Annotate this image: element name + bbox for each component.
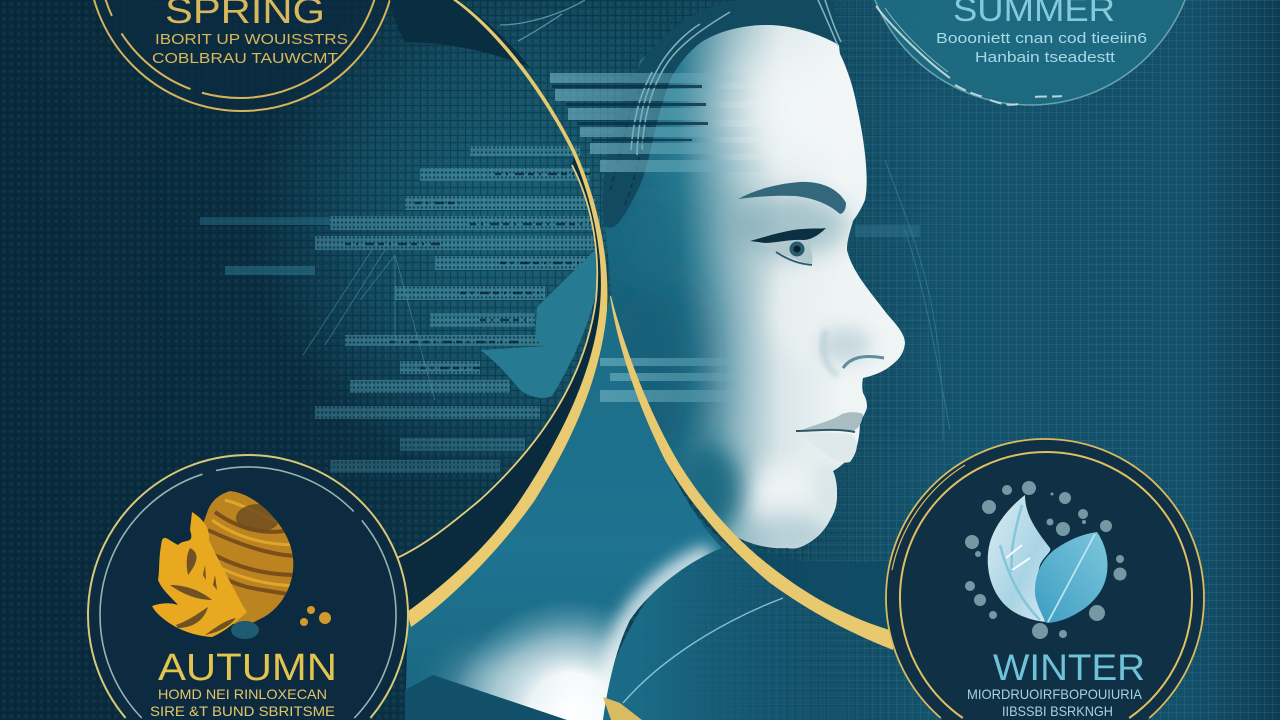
lips <box>796 412 863 463</box>
panel: summer <box>863 0 1197 105</box>
leaf dark cuts <box>170 548 236 635</box>
data stripes: left dissolving text rows <box>200 146 600 473</box>
curve: thin inner gold arc <box>397 165 597 558</box>
winter heading: WINTER <box>993 647 1145 688</box>
iris <box>790 242 804 256</box>
shoulder shadow <box>405 675 567 720</box>
spring text <box>152 31 348 67</box>
autumn heading: AUTUMN <box>158 647 337 689</box>
neck and shoulder <box>405 296 722 720</box>
blue leaf midrib <box>1048 534 1095 622</box>
autumn outer ring <box>88 455 408 718</box>
leaf seeds <box>300 606 331 626</box>
autumn text: HOMD NEI RINLOXECAN <box>158 686 327 702</box>
dark zone under chin <box>745 543 893 631</box>
spring text: IBORIT UP WOUISSTRS <box>155 31 348 48</box>
panel: autumn <box>88 455 408 720</box>
autumn inner ring <box>100 467 396 718</box>
eyebrow <box>738 182 846 214</box>
winter inner ring <box>900 452 1192 718</box>
nose silhouette on left side <box>480 250 597 398</box>
glitch stripes over face <box>550 73 920 402</box>
winter outer ring <box>886 439 1204 718</box>
eye <box>750 228 826 265</box>
dark crescent band <box>397 150 608 627</box>
blue leaf <box>1035 532 1108 623</box>
winter text: IIBSSBI BSRKNGH <box>1002 703 1113 719</box>
summer text: Hanbain tseadestt <box>975 49 1116 66</box>
autumn text <box>150 686 335 719</box>
curve: thin pale arc below chin <box>623 598 783 703</box>
spring outer ring <box>88 0 396 111</box>
summer outer ring <box>863 0 1197 105</box>
yellow fern leaf <box>152 512 247 637</box>
top dark wedge beside gold arc <box>390 0 530 68</box>
summer text <box>936 30 1147 66</box>
panel: spring <box>88 0 396 111</box>
autumn text: SIRE &T BUND SBRITSME <box>150 703 335 719</box>
icon: winter leaves <box>965 481 1126 639</box>
sketch lines <box>303 250 435 400</box>
hair texture <box>610 90 650 205</box>
faint arcs at top centre <box>500 0 585 41</box>
icon: autumn leaf <box>152 480 331 639</box>
pale leaf <box>988 495 1050 622</box>
summer sketch marks <box>876 6 1062 105</box>
curve: second gold arc around face <box>610 296 893 650</box>
hair <box>603 0 842 228</box>
spring text: COBLBRAU TAUWCMT <box>152 50 338 67</box>
neck glow <box>436 536 722 720</box>
winter sketch arc <box>892 465 965 570</box>
curve: thick gold arc <box>407 0 608 627</box>
round striped leaf <box>204 491 294 624</box>
frost sparkle <box>1006 545 1030 570</box>
winter text <box>967 686 1143 719</box>
dark glyph flecks in rows <box>345 174 590 368</box>
spring inner ring <box>99 0 381 98</box>
panel: winter <box>886 439 1204 720</box>
frost bubbles <box>965 481 1126 639</box>
region below second gold arc <box>600 505 893 720</box>
leaf teal blot <box>231 621 259 639</box>
face <box>595 0 905 557</box>
winter text: MIORDRUOIRFBOPOUIURIA <box>967 686 1143 702</box>
summer text: Boooniett cnan cod tieeiin6 <box>936 30 1147 47</box>
pale leaf veins <box>1000 505 1040 620</box>
hair highlights <box>631 0 841 155</box>
nose wing and nostril <box>823 330 884 376</box>
gold collar accent <box>603 697 642 720</box>
faint profile sketch lines <box>885 160 950 440</box>
face shading <box>595 40 871 557</box>
